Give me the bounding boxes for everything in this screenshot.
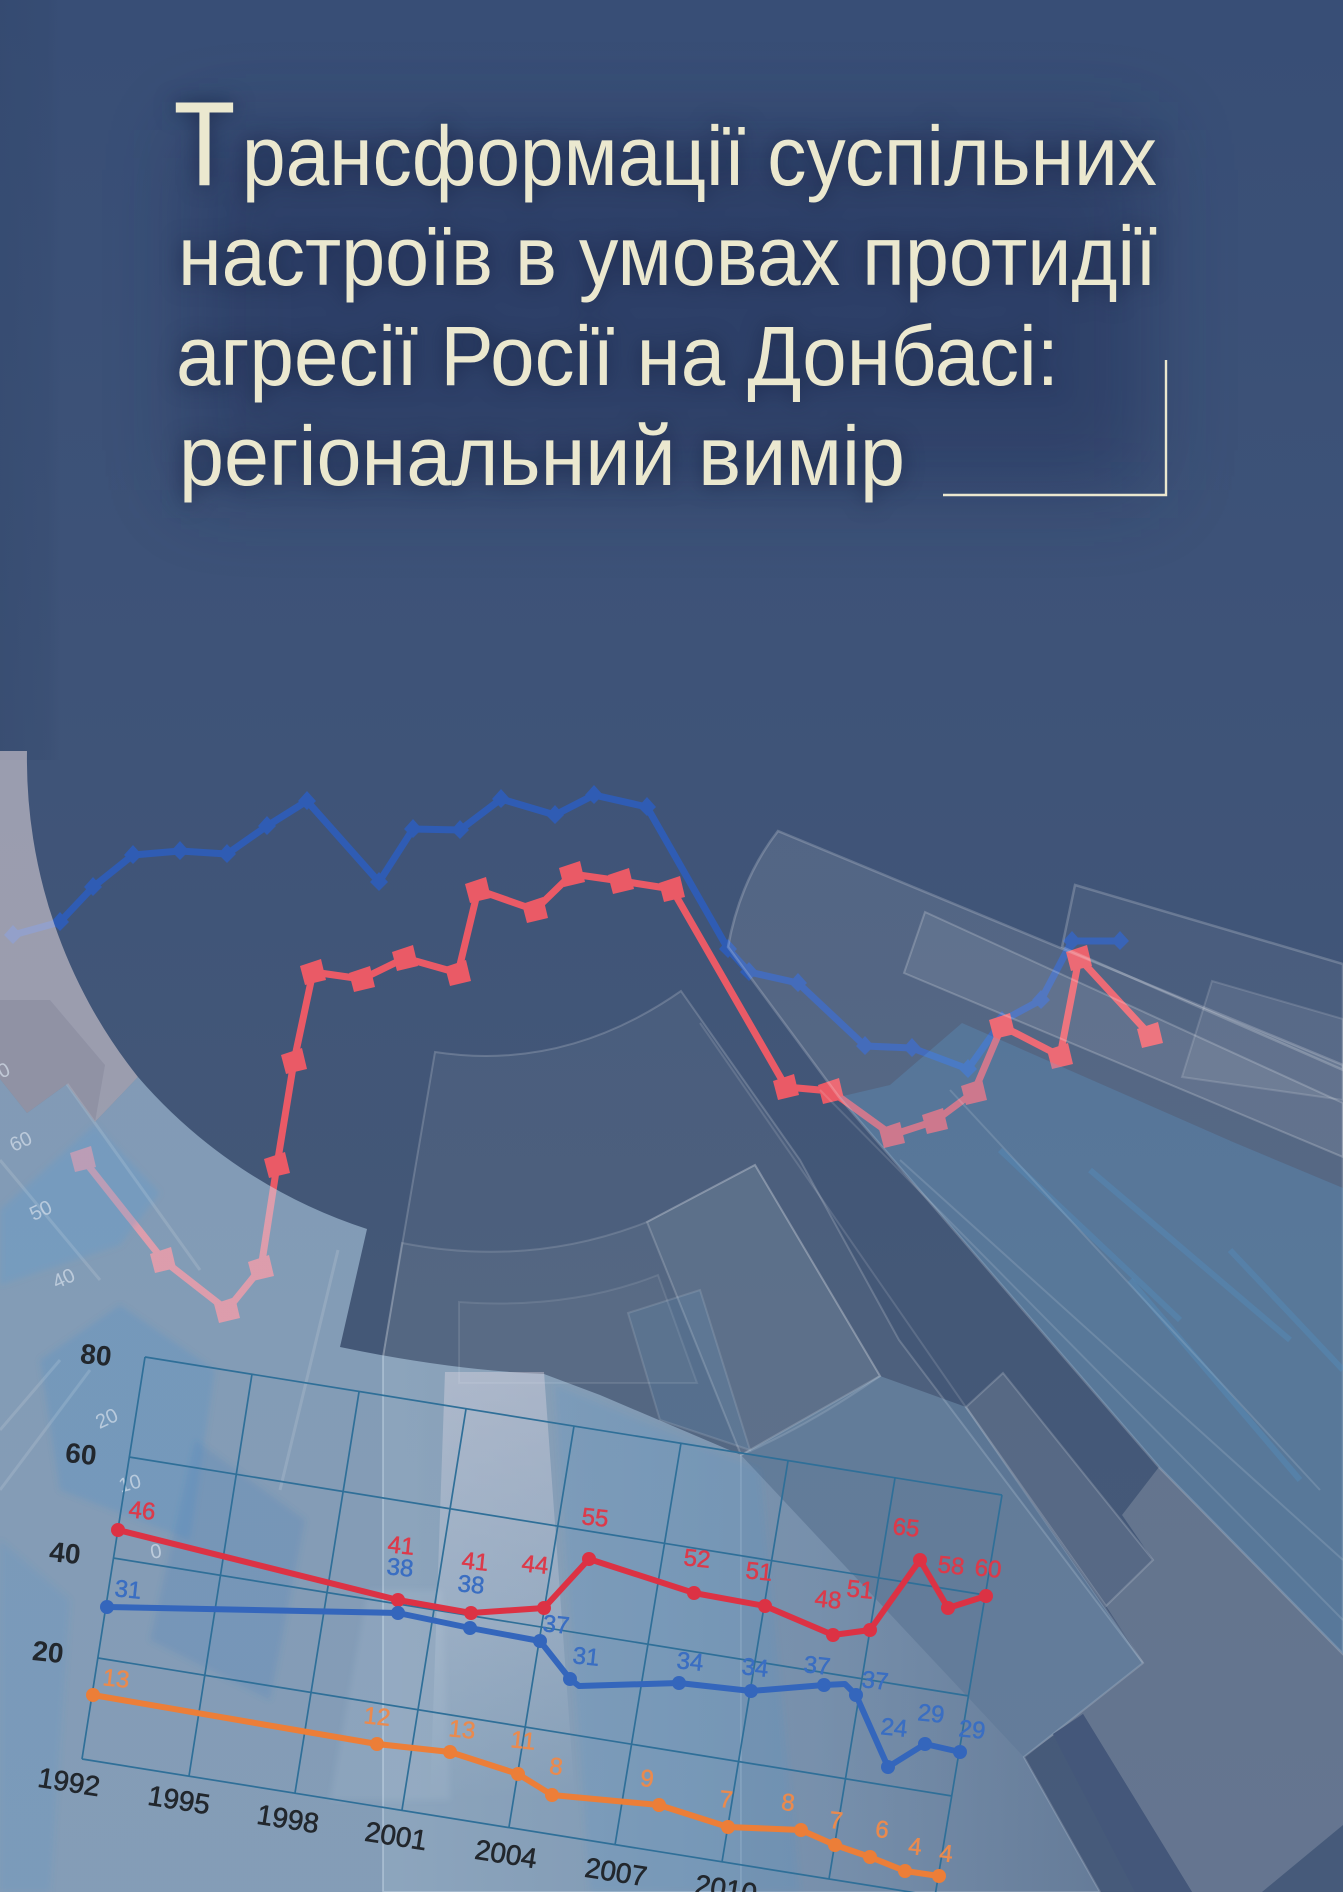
panel: small blue rect: [628, 1290, 750, 1450]
dark lower strip: [1053, 1714, 1192, 1892]
orange data labels: 13: [101, 1664, 131, 1694]
y-axis labels: 80: [79, 1338, 113, 1372]
blue data labels: 34: [740, 1653, 770, 1683]
red data labels: 41: [460, 1547, 490, 1577]
left ring: grey upper sector: [0, 751, 138, 1122]
blue data labels: 37: [802, 1651, 832, 1681]
pale vertical column: [430, 1372, 575, 1800]
x-axis year labels: 1998: [255, 1799, 321, 1839]
blue data labels: 38: [385, 1553, 415, 1583]
blue data labels: 38: [456, 1570, 486, 1600]
y-axis labels: [31, 1338, 113, 1669]
orange data labels: [101, 1664, 954, 1868]
panel: second arc sector: [383, 1165, 880, 1892]
red data labels: 58: [936, 1551, 966, 1581]
orange data labels: 12: [362, 1702, 392, 1732]
y-axis labels: 20: [31, 1635, 65, 1669]
panel: fan strip one: [904, 912, 1343, 1157]
blue data labels: 34: [675, 1647, 705, 1677]
orange data labels: 11: [509, 1726, 537, 1756]
panel lines: fan edges: [700, 1023, 1343, 1663]
title line 1: Т: [174, 78, 235, 211]
left ring: darker grey band: [0, 1000, 105, 1122]
series: blue point markers: [100, 1600, 967, 1774]
orange data labels: 7: [718, 1786, 734, 1814]
blue trend line: [13, 795, 1120, 1069]
blue streaks: [1000, 1150, 1343, 1480]
blue patch centre: [555, 1385, 800, 1892]
left ring: blue lower sector with floor: [0, 1077, 1100, 1892]
faint dial scale numbers: 10: [116, 1470, 144, 1498]
panel: wide lower: [741, 1376, 1143, 1757]
orange data labels: 6: [874, 1816, 890, 1844]
panel: big upper fan: [728, 831, 1343, 1654]
red data labels: 48: [813, 1585, 843, 1615]
blue data labels: 29: [916, 1699, 946, 1729]
red data labels: 55: [580, 1503, 610, 1533]
title line 1: рансформації суспільних: [242, 109, 1157, 203]
panel: inner sector: [383, 991, 1143, 1892]
series: orange: [93, 1695, 939, 1876]
panel: fan strip three: [1182, 981, 1343, 1100]
upper line chart: underlay lines: [13, 795, 1150, 1310]
x-axis year labels: 1995: [146, 1780, 212, 1820]
orange data labels: 7: [828, 1807, 844, 1835]
red trend line: [83, 874, 1150, 1310]
series: red: [118, 1530, 986, 1635]
red data labels: 60: [973, 1554, 1003, 1584]
panel: tall inner rect: [647, 1165, 880, 1455]
corner bracket ornament: [943, 360, 1166, 495]
x-axis year labels: 2001: [363, 1816, 429, 1856]
pale secondary column: [330, 1590, 450, 1800]
series: blue: [107, 1607, 960, 1767]
book spine band: [0, 0, 60, 760]
blue data labels: 29: [957, 1715, 987, 1745]
blue patch lower: [150, 1440, 305, 1700]
title line 2: настроїв в умовах протидії: [178, 209, 1157, 303]
faint dial scale numbers: 50: [26, 1196, 56, 1226]
red data labels: 46: [127, 1496, 157, 1526]
blue data labels: 37: [860, 1666, 890, 1696]
left overlays: [0, 1059, 800, 1892]
title line 4: регіональний вимір: [179, 409, 905, 503]
orange data labels: 13: [447, 1715, 477, 1745]
x-axis year labels: 1992: [36, 1762, 102, 1802]
panel: right of dark strip: [1024, 1467, 1343, 1892]
blue data labels: 37: [541, 1610, 571, 1640]
chart grid: [82, 1357, 1002, 1892]
title shadow glow: [190, 130, 1150, 490]
red data labels: 44: [520, 1550, 550, 1580]
faint dial scale numbers: 60: [6, 1127, 36, 1157]
panel: third arc sector: [459, 1275, 697, 1383]
x-axis year labels: 2007: [583, 1852, 649, 1892]
blue data labels: 31: [113, 1575, 143, 1605]
faint dial scale numbers: 0: [149, 1540, 163, 1564]
red data labels: 65: [891, 1513, 921, 1543]
faint dial scale numbers: 40: [49, 1264, 79, 1294]
orange data labels: 8: [548, 1753, 564, 1781]
x-axis year labels: 2004: [473, 1834, 539, 1874]
panel: fan strip two: [1062, 885, 1343, 1070]
title: [174, 78, 1157, 503]
red data labels: 41: [386, 1531, 416, 1561]
faint dial scale numbers: 20: [92, 1404, 122, 1434]
blue patch left edge: [0, 1540, 70, 1892]
lower line chart: [31, 1338, 1003, 1892]
orange data labels: 9: [639, 1765, 655, 1793]
panel: blue tint fan: [839, 1023, 1343, 1654]
y-axis labels: 40: [48, 1536, 82, 1570]
red data labels: 51: [744, 1557, 774, 1587]
red data labels: [127, 1496, 1003, 1615]
title line 1: [174, 78, 1157, 211]
blue patch upper: [0, 1124, 160, 1285]
orange data labels: 4: [938, 1840, 954, 1868]
blue data labels: 24: [879, 1713, 909, 1743]
translucent fan panels: [383, 831, 1343, 1892]
faint dial scale numbers: [0, 1059, 163, 1564]
orange data labels: 8: [780, 1789, 796, 1817]
panel: narrow lower right: [966, 1373, 1153, 1606]
blue data labels: 31: [571, 1642, 601, 1672]
title line 3: агресії Росії на Донбасі:: [176, 309, 1059, 403]
y-axis labels: 60: [64, 1437, 98, 1471]
orange data labels: 4: [907, 1833, 923, 1861]
red data labels: 51: [845, 1575, 875, 1605]
red data labels: 52: [682, 1544, 712, 1574]
x-axis year labels: [36, 1762, 869, 1892]
blue patch middle: [40, 1305, 215, 1540]
blue data labels: [113, 1553, 987, 1745]
pale diagonal rays: [0, 1084, 338, 1490]
